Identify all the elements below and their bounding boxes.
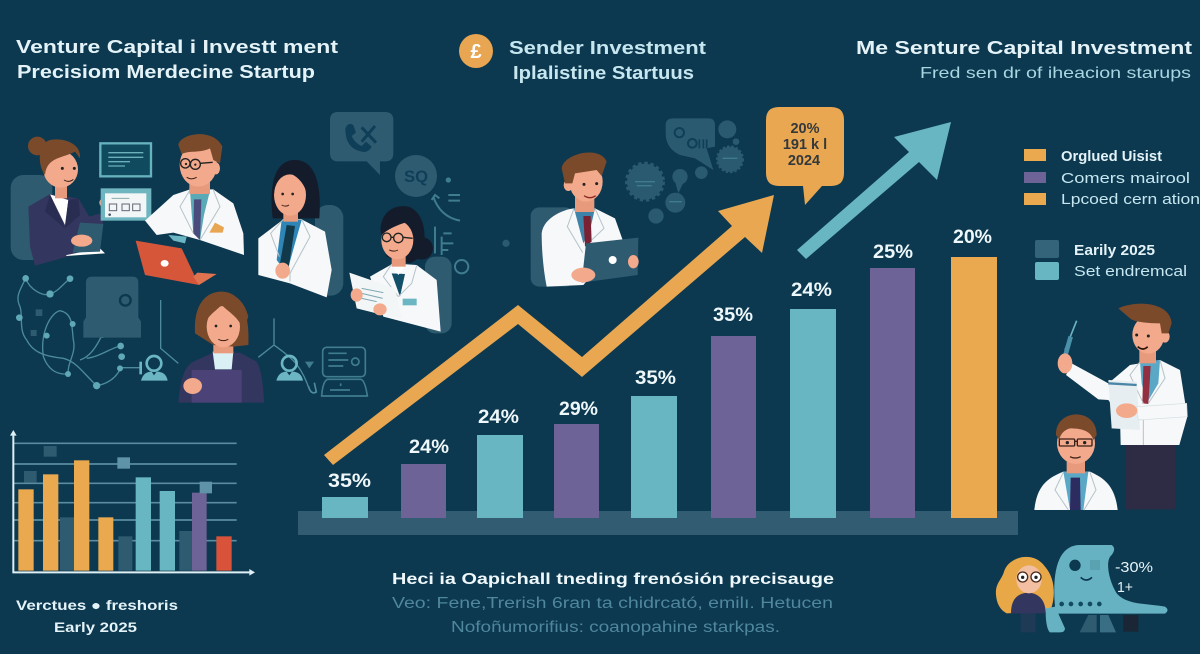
icon: person pin right <box>276 356 314 381</box>
legend: bottom group: Set endremcal <box>1074 263 1187 280</box>
bar value labels: 29% <box>559 399 598 420</box>
callout: orange speech bubble <box>766 107 844 205</box>
arrow: orange zigzag trend <box>324 195 774 465</box>
icon: coin: £ <box>470 41 482 63</box>
title: right heading <box>856 37 1192 82</box>
stat labels: mascot: -30% <box>1115 559 1153 576</box>
figure: woman in suit <box>11 137 113 266</box>
screen: data card <box>101 188 151 221</box>
figure: woman doctor reading paper <box>349 206 452 333</box>
bar value labels: 24% <box>409 437 449 458</box>
title: center heading: Iplalistine Startuus <box>513 62 694 83</box>
decorative glyphs right of badge <box>432 178 468 273</box>
stat labels: mascot: 1+ <box>1117 579 1133 596</box>
bar value labels: 20% <box>953 227 992 248</box>
bar 3 <box>477 435 523 518</box>
icon: chat bubble with phone <box>330 112 393 175</box>
icon: computer outline <box>322 347 367 396</box>
coat <box>542 208 623 287</box>
bar value labels: 24% <box>791 280 832 301</box>
network diagram <box>18 278 316 393</box>
icon: red laptop <box>136 241 217 285</box>
callout: orange speech bubble: 191 k l <box>783 137 827 153</box>
caption: small chart: Verctues ● freshoris <box>16 597 178 613</box>
head <box>562 152 607 212</box>
legend: bottom group: Earily 2025 <box>1074 243 1155 259</box>
callout: orange speech bubble: 20% <box>790 121 820 137</box>
screen: text card <box>100 143 151 176</box>
bar 4 <box>554 424 599 518</box>
bar value labels <box>328 227 992 492</box>
figure: standing doctor with syringe <box>1058 304 1187 509</box>
background gears and bubbles <box>502 118 743 247</box>
legend: top group: Comers mairool <box>1061 170 1190 187</box>
bar 8 <box>870 268 915 518</box>
title: left heading: Precisiom Merdecine Startup <box>17 61 315 82</box>
figure: woman doctor with dark hair <box>258 160 343 297</box>
network nodes <box>16 275 125 389</box>
bar value labels: 35% <box>635 368 676 389</box>
chart: main bar chart <box>298 227 1018 535</box>
callout: orange speech bubble: 2024 <box>788 153 820 169</box>
text block: bottom center summary <box>392 571 834 636</box>
panel: team of investors and doctors <box>11 112 468 403</box>
chart: small bar chart bottom left <box>10 430 255 576</box>
caption: small chart: Early 2025 <box>54 619 137 635</box>
text block: bottom center summary: Veo: Fene,Trerish 6ran ta chidrcató, emilı. Hetucen <box>392 595 833 612</box>
title: right heading: Me Senture Capital Investment <box>856 37 1192 58</box>
bar 1 <box>322 497 368 518</box>
figure: doctor with round glasses <box>145 134 244 255</box>
figure: woman with tablet <box>178 292 264 403</box>
figures: doctors and mascot bottom right <box>996 304 1187 632</box>
shirt and tie <box>567 208 604 253</box>
figure: teal mascot <box>1046 545 1167 632</box>
chair <box>531 207 574 287</box>
icon: SQ badge: SQ <box>404 167 428 186</box>
bar 6 <box>711 336 756 518</box>
title: left heading: Venture Capital i Investt ment <box>16 36 338 57</box>
bar 7 <box>790 309 836 518</box>
caption: small chart <box>16 597 178 635</box>
text block: bottom center summary: Nofoñumorifius: coanopahine starkpas. <box>451 619 780 636</box>
bar value labels: 25% <box>873 242 913 263</box>
text block: bottom center summary: Heci ia Oapichall tneding frenósión precisauge <box>392 571 834 588</box>
figure: blonde girl <box>996 557 1054 632</box>
axes <box>13 434 252 572</box>
figure: doctor with glasses <box>1034 414 1118 510</box>
arrow: teal trend <box>797 122 951 259</box>
chart baseline band <box>298 511 1018 535</box>
icon: SQ badge <box>395 155 437 197</box>
bar 2 <box>401 464 446 518</box>
legend: top group: Lpcoed cern ation <box>1061 191 1200 208</box>
icon: coin <box>459 34 493 68</box>
legend: top group <box>1024 149 1200 208</box>
bars <box>18 446 232 571</box>
icon: person pin left <box>139 356 168 381</box>
bar value labels: 35% <box>713 305 753 326</box>
title: center heading <box>509 37 706 83</box>
tablet <box>571 238 639 283</box>
title: right heading: Fred sen dr of iheacion starups <box>920 65 1191 82</box>
bar value labels: 24% <box>478 407 519 428</box>
bar 5 <box>631 396 677 518</box>
icon: safe box <box>83 277 141 338</box>
grid lines <box>13 443 237 541</box>
legend: bottom group <box>1035 240 1187 280</box>
figure: doctor with tablet center <box>502 118 743 287</box>
stat labels: mascot <box>1115 559 1153 596</box>
bar 9 <box>951 257 997 518</box>
title: center heading: Sender Investment <box>509 37 706 58</box>
bar value labels: 35% <box>328 471 371 492</box>
title: left heading <box>16 36 338 82</box>
legend: top group: Orglued Uisist <box>1061 149 1162 165</box>
